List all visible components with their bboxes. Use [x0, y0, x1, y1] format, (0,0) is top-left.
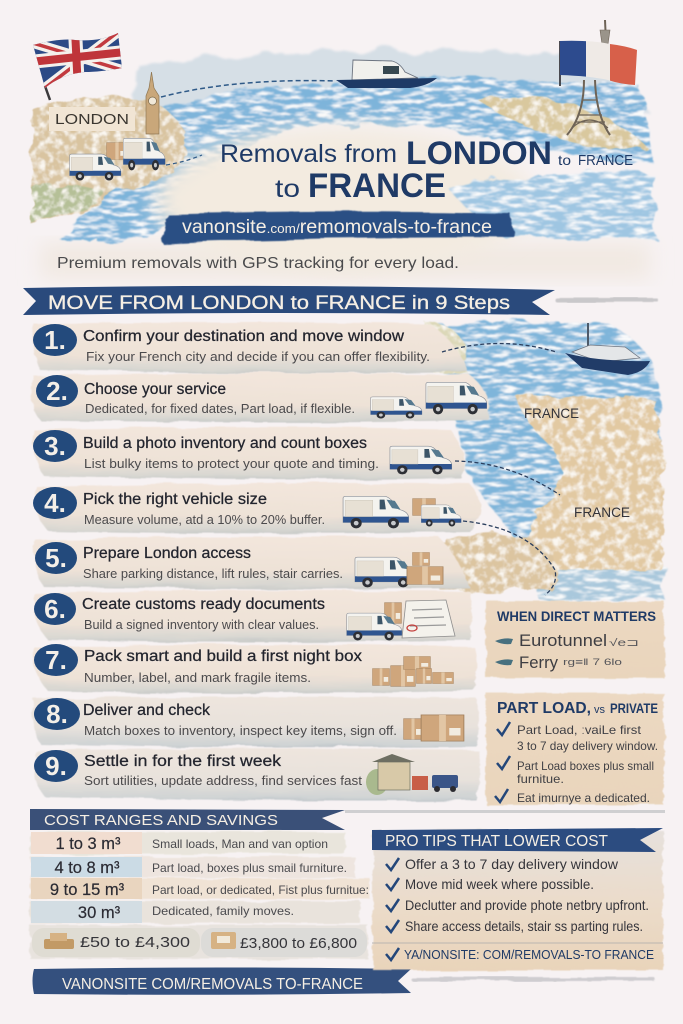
land: lower peninsula — [430, 534, 558, 590]
label: London — [49, 107, 135, 131]
text: step 8: Deliver and check — [83, 702, 210, 719]
left land London — [32, 97, 188, 225]
heading: PART LOAD, — [497, 700, 591, 717]
item: part load first — [497, 722, 658, 753]
text: step 2: Choose your service — [84, 381, 226, 398]
item: Ferry: Ferry — [519, 653, 558, 672]
tagline: Premium removals with GPS tracking for every load. — [57, 255, 459, 272]
icon: boxes left — [44, 933, 74, 949]
price: high: £3,800 to £6,800 — [240, 935, 357, 952]
badge 1: 1. — [44, 325, 66, 355]
text: step 7: Number, label, and mark fragile items. — [84, 671, 311, 685]
icon: clipboard — [402, 600, 455, 638]
text: step 6: Create customs ready documents — [82, 596, 325, 613]
row: 9 to 15: Part load, or dedicated, Fist plus furnitue: — [152, 883, 369, 897]
panel: when direct matters — [486, 601, 664, 678]
flag: United Kingdom — [30, 30, 125, 100]
panel: step 2 — [31, 373, 490, 422]
icon: van front — [70, 154, 121, 180]
text: step 3: List bulky items to protect your quote and timing. — [84, 457, 379, 471]
text: step 5: Prepare London access — [83, 545, 251, 562]
heading: vs — [594, 704, 606, 716]
land: top left green — [425, 322, 470, 375]
label: France upper: FRANCE — [524, 405, 579, 421]
icon: boxes — [404, 715, 464, 741]
badge 4: 4. — [44, 488, 66, 518]
badge 1 — [33, 324, 77, 356]
price: low: £50 to £4,300 — [80, 934, 190, 951]
sky clouds — [130, 50, 652, 125]
icon: Big Ben — [146, 72, 159, 134]
icon: boxes — [407, 552, 443, 584]
panel: step 9 — [34, 748, 481, 800]
badge 4 — [33, 487, 77, 519]
text: step 1: Fix your French city and decide if you can offer flexibility. — [86, 350, 430, 364]
title: FRANCE — [308, 167, 446, 205]
icon: large van — [343, 496, 409, 528]
text: step 5 — [83, 545, 343, 581]
item: part load boxes: Part Load boxes plus small — [517, 759, 654, 773]
icon: boxes — [372, 656, 453, 686]
heading banner: COST RANGES AND SAVINGS — [44, 812, 278, 829]
shadow stroke under part load — [345, 810, 665, 813]
panel: step 3 — [33, 427, 464, 480]
text: step 9: Settle in for the first week — [84, 753, 281, 770]
icon: box — [384, 603, 402, 623]
badge 3 — [33, 430, 77, 462]
heading: PRIVATE — [610, 701, 658, 716]
icon: house and car — [366, 754, 458, 795]
shadow stroke beside footer — [411, 977, 655, 981]
text: step 2: Dedicated, for fixed dates, Part load, if flexible. — [85, 402, 355, 416]
icon: large van — [426, 382, 487, 414]
panel: step 1 — [32, 322, 468, 374]
item: Ferry: rg≡‖ 7 6lo — [563, 657, 622, 667]
icon: van — [347, 613, 402, 640]
row: 30: Dedicated, family moves. — [152, 904, 294, 918]
title: FRANCE — [578, 152, 633, 169]
row: 9 to 15: 9 to 15 m³ — [50, 881, 125, 899]
icon: van with boxes — [413, 499, 461, 527]
badge 5 — [35, 542, 77, 574]
row: 1 to 3 — [30, 832, 345, 854]
item: part load boxes: furnitue. — [517, 772, 564, 786]
text: step 4: Measure volume, atd a 10% to 20% buffer. — [84, 513, 325, 527]
badge 9: 9. — [45, 751, 67, 781]
tip 2: Move mid week where possible. — [405, 876, 594, 892]
badge 8: 8. — [46, 699, 68, 729]
heading banner — [372, 828, 663, 852]
wash behind tagline — [40, 243, 650, 279]
icon: ship on map — [565, 323, 650, 375]
item: Eurotunnel: Eurotunnel — [519, 631, 607, 650]
sea band — [60, 78, 655, 240]
lower sea — [540, 565, 665, 600]
badge 8 — [34, 698, 80, 730]
title: to — [558, 152, 571, 168]
row: 1 to 3: Small loads, Man and van option — [152, 837, 328, 851]
text: step 7 — [84, 648, 362, 685]
text: step 8: Match boxes to inventory, inspect key items, sign off. — [84, 724, 397, 738]
icon: boxes right — [211, 932, 236, 949]
icon: van — [355, 557, 418, 587]
panel: part load vs private — [486, 693, 664, 805]
icon: box behind van — [107, 143, 127, 159]
badge 6: 6. — [44, 594, 66, 624]
title: LONDON — [406, 135, 552, 171]
sea — [440, 320, 660, 560]
badge 9 — [34, 750, 78, 782]
row: 4 to 8: 4 to 8 m³ — [54, 859, 120, 877]
text: step 3 — [83, 435, 379, 471]
badge 2 — [36, 375, 78, 407]
item: part load first: Part Load, ːvaiLe first — [517, 723, 642, 737]
row: 4 to 8 — [30, 857, 355, 877]
footer banner — [32, 968, 411, 995]
title: to — [275, 175, 300, 203]
text: step 7: Pack smart and build a first night box — [84, 648, 362, 665]
row: 4 to 8: Part load, boxes plus smail furniture. — [152, 861, 347, 875]
text: step 8 — [83, 702, 397, 738]
badge 7 — [34, 644, 78, 676]
badge 3: 3. — [44, 431, 66, 461]
prices band — [30, 925, 368, 959]
text: step 4: Pick the right vehicle size — [83, 491, 267, 508]
flag: France — [559, 40, 637, 86]
panel: pro tips — [372, 828, 663, 970]
item: part load boxes — [497, 756, 654, 786]
row: 30 — [30, 901, 360, 923]
website line — [372, 943, 663, 962]
land: upper coast — [515, 395, 665, 570]
panel: step 8 — [32, 697, 479, 747]
text: step 1: Confirm your destination and move window — [83, 328, 405, 345]
text: step 9: Sort utilities, update address, find services fast — [84, 774, 363, 788]
title — [220, 135, 633, 205]
lower right sea — [450, 171, 655, 238]
routes on map — [442, 344, 560, 595]
item: dedicated: Eat imurnye a dedicated. — [517, 791, 650, 805]
heading banner: nine steps: MOVE FROM LONDON to FRANCE in 9 Steps — [48, 293, 510, 314]
banner: website: vanonsite .com/remomovals-to-france — [182, 217, 492, 238]
icon: van rear — [123, 138, 165, 170]
row: 30: 30 m³ — [78, 904, 121, 922]
tip 3: Declutter and provide phote netbry upfront. — [405, 897, 649, 913]
icon: Eiffel Tower — [567, 20, 610, 135]
right land France — [478, 96, 650, 150]
text: step 6: Build a signed inventory with clear values. — [84, 618, 319, 632]
website line: YA/NONSITE: COM/REMOVALS-TO FRANCE — [404, 947, 654, 962]
row: 9 to 15 — [30, 878, 370, 899]
item: Ferry — [495, 653, 622, 672]
badge 6 — [34, 593, 76, 625]
banner: website — [162, 211, 515, 243]
label: France lower: FRANCE — [574, 504, 630, 520]
text: step 6 — [82, 596, 325, 632]
item: Eurotunnel: √e⊐ — [609, 637, 639, 649]
panel: step 4 — [33, 483, 480, 533]
left land green — [32, 184, 105, 224]
panel: step 6 — [33, 590, 472, 642]
tip 1: Offer a 3 to 7 day delivery window — [405, 856, 619, 872]
route: vans to sea — [166, 155, 202, 165]
badge 5: 5. — [45, 543, 67, 573]
title: Removals from — [220, 140, 397, 168]
heading banner: PRO TIPS THAT LOWER COST — [385, 833, 609, 850]
text: step 3: Build a photo inventory and count boxes — [83, 435, 367, 452]
panel: step 7 — [33, 644, 477, 693]
icon: ferry — [336, 60, 437, 88]
row: 1 to 3: 1 to 3 m³ — [55, 835, 121, 853]
route: London to boat — [161, 81, 335, 97]
text: step 9 — [84, 753, 363, 788]
heading banner — [30, 809, 345, 830]
heading banner: nine steps — [23, 286, 555, 315]
item: Eurotunnel — [495, 631, 639, 650]
icon: van — [390, 446, 452, 474]
shadow stroke beside banner — [555, 298, 658, 302]
icon: small van — [371, 397, 422, 419]
text: step 5: Share parking distance, lift rules, stair carries. — [83, 567, 343, 581]
heading: WHEN DIRECT MATTERS — [497, 609, 656, 624]
panel: step 5 — [34, 537, 470, 589]
footer banner: VANONSITE COM/REMOVALS TO-FRANCE — [62, 976, 363, 993]
item: part load first: 3 to 7 day delivery window. — [517, 739, 658, 753]
tip 4: Share access details, stair ss parting rules. — [405, 918, 643, 934]
text: step 2 — [84, 381, 355, 416]
text: step 4 — [83, 491, 325, 527]
panel: cost ranges — [30, 809, 370, 959]
text: step 1 — [83, 328, 430, 364]
badge 7: 7. — [45, 645, 67, 675]
label: London: LONDON — [55, 111, 129, 128]
panel: hero map — [30, 20, 655, 272]
cream centre wash — [155, 128, 535, 272]
panel: right sea map — [425, 320, 665, 600]
badge 2: 2. — [46, 376, 68, 406]
